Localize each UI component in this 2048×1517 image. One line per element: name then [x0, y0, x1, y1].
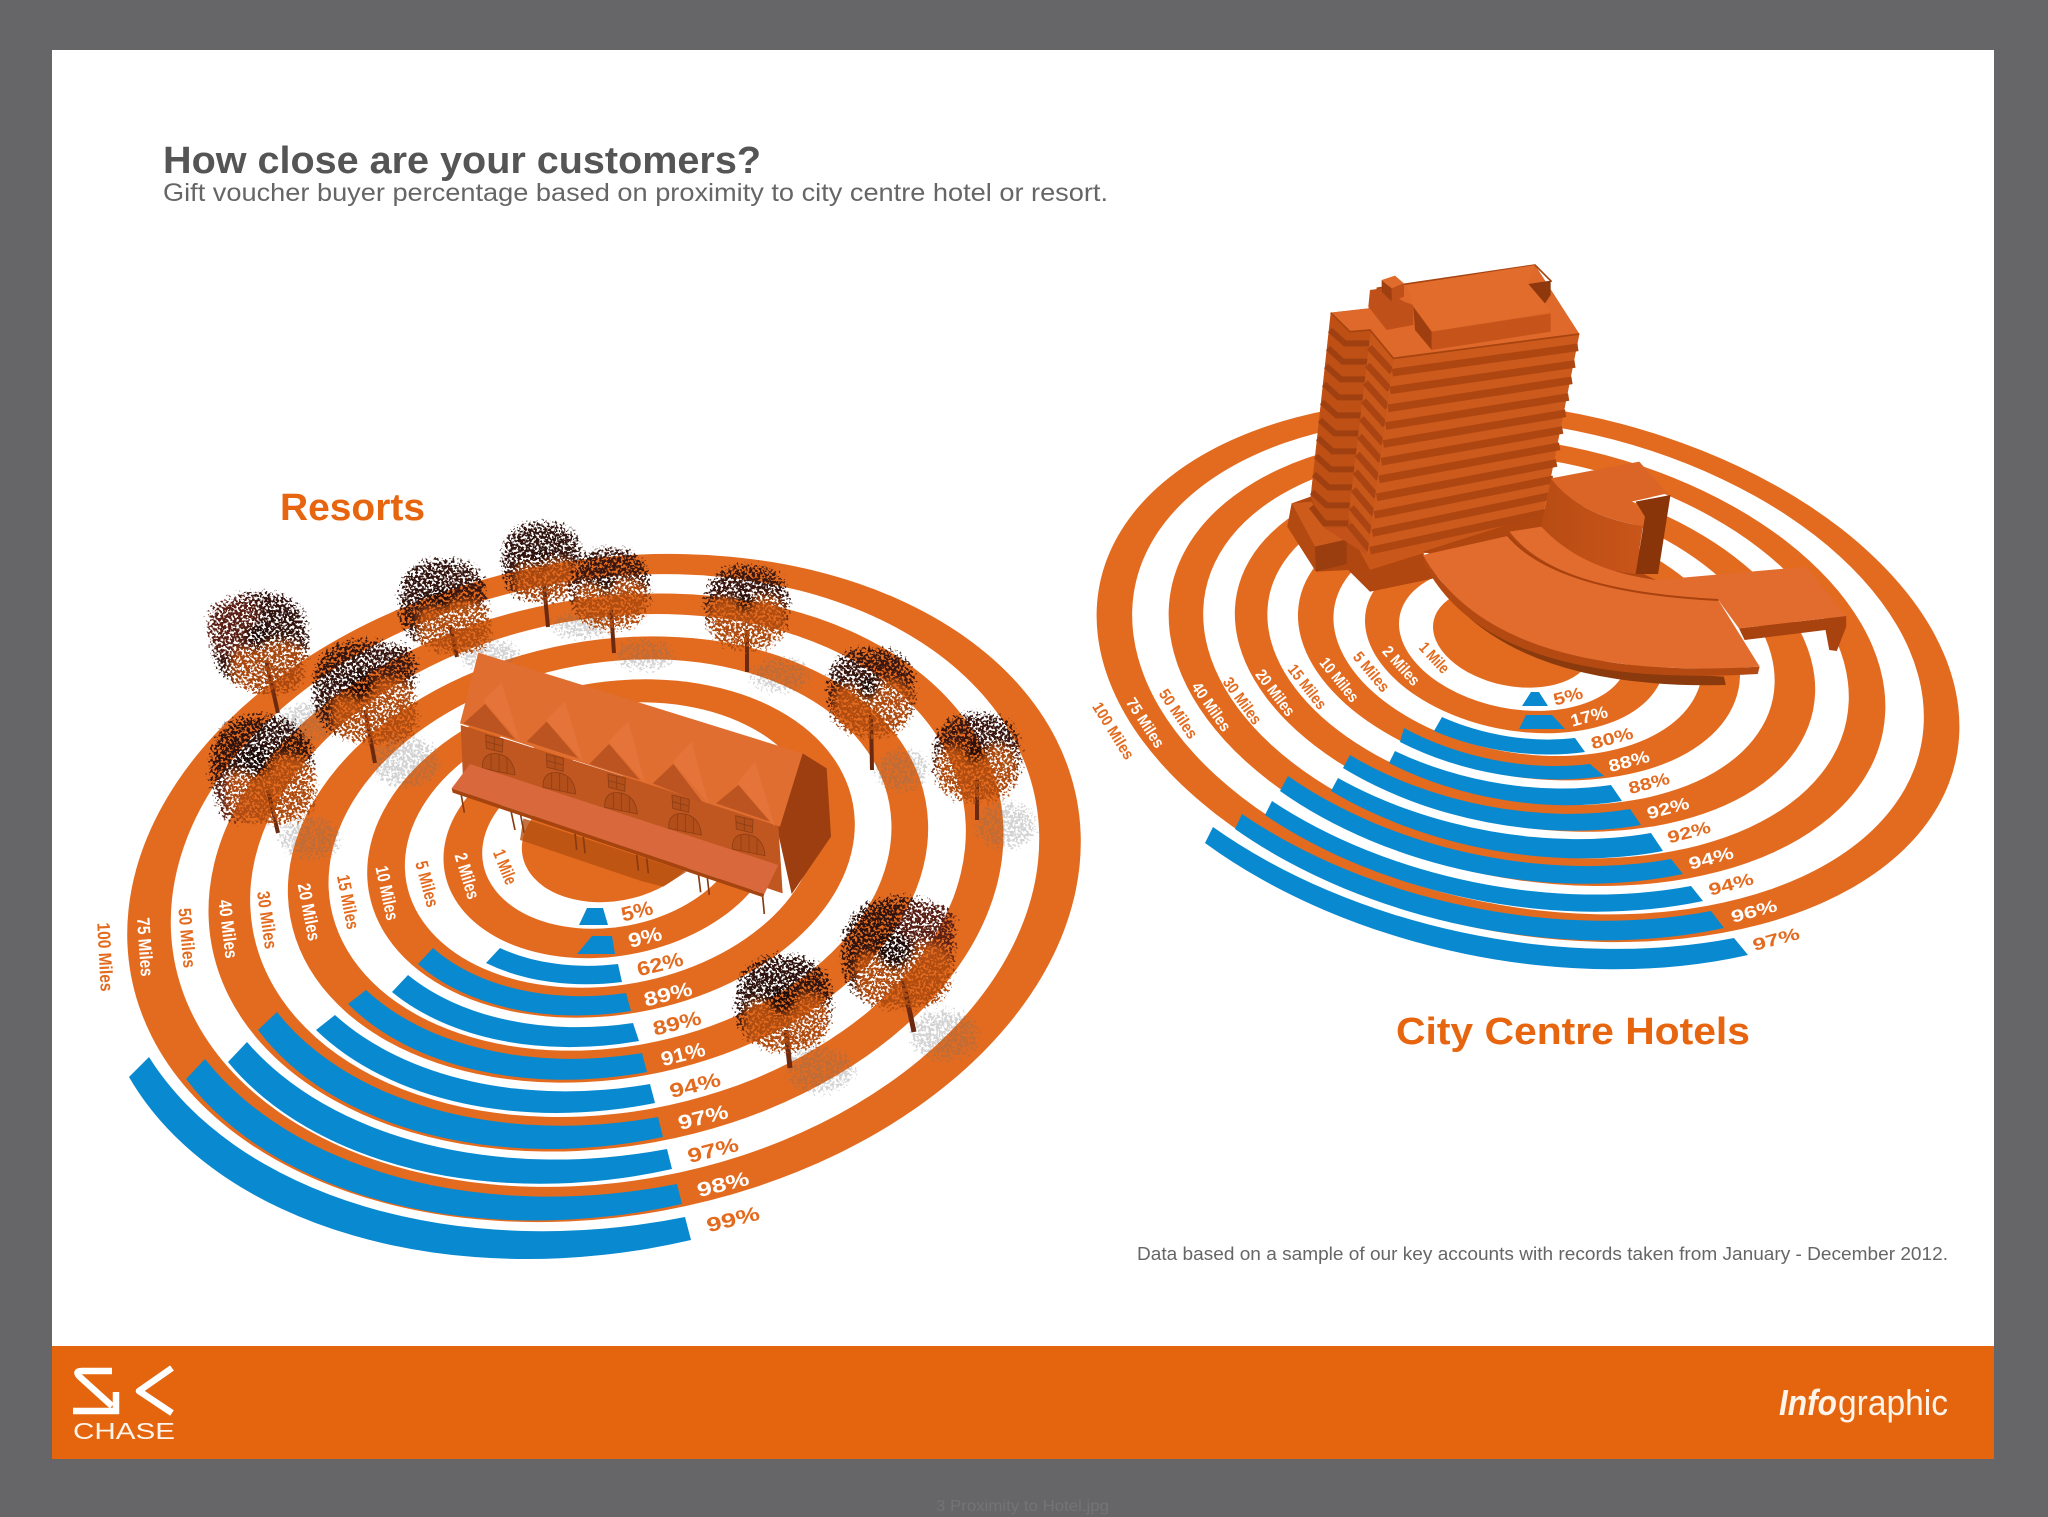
tree 1 [210, 594, 306, 713]
roof service block [1368, 288, 1413, 330]
resorts distance labels: 2 Miles [451, 851, 483, 901]
hotels distance labels: 20 Miles [1252, 667, 1298, 720]
hotels distance labels [1088, 639, 1452, 763]
title: How close are your customers? [163, 140, 761, 182]
infographic tag: graphic [1838, 1382, 1948, 1423]
tree 5 [504, 524, 580, 627]
logo word: CHASE [73, 1418, 175, 1444]
resorts distance labels: 50 Miles [174, 907, 200, 969]
hotels percentage labels: 97% [1750, 924, 1802, 955]
resorts distance labels: 30 Miles [253, 890, 281, 950]
hotels distance labels: 15 Miles [1284, 662, 1329, 713]
rear block [1311, 315, 1371, 528]
tree 9 [935, 715, 1019, 820]
podium backing [1287, 497, 1543, 592]
tree 4 [401, 561, 489, 657]
roof cube [1382, 276, 1404, 302]
resorts distance labels: 100 Miles [93, 922, 117, 992]
porch roof [452, 764, 778, 894]
lower deck top [1423, 536, 1760, 668]
podium left [1292, 502, 1347, 547]
lower deck edge [1423, 555, 1760, 676]
hotels distance labels: 30 Miles [1219, 674, 1264, 728]
infographic tag [1779, 1382, 1948, 1423]
hotels distance labels: 1 Mile [1415, 639, 1452, 677]
resorts percentage labels: 91% [659, 1039, 708, 1071]
tree 8 [829, 650, 913, 770]
data footnote: Data based on a sample of our key accounts with records taken from January - December 2012. [1137, 1244, 1948, 1264]
resort building [452, 653, 831, 914]
resorts percentage labels: 97% [676, 1101, 731, 1135]
resorts percentage labels [619, 897, 762, 1237]
hotels percentage labels: 88% [1606, 747, 1652, 776]
penthouse [1407, 265, 1551, 350]
hotels percentage labels: 94% [1686, 843, 1736, 874]
deck backing [1423, 513, 1718, 600]
hotels blue percentage bars [1205, 692, 1748, 969]
hotels distance labels: 75 Miles [1122, 695, 1167, 751]
bridge front face [1739, 616, 1846, 651]
hotels percentage labels [1551, 683, 1802, 955]
front block side face [1348, 332, 1393, 555]
main roof [460, 653, 803, 827]
resorts distance labels: 5 Miles [411, 859, 443, 909]
hotels percentage labels: 88% [1626, 769, 1672, 798]
resorts percentage labels: 89% [651, 1007, 704, 1041]
city centre hotels chart [1048, 265, 2008, 1015]
SK Chase logo [73, 1368, 175, 1444]
hotel low-rise wing and curved deck [1423, 462, 1846, 685]
infographic tag: Info [1779, 1382, 1837, 1423]
hotels distance labels: 10 Miles [1316, 655, 1362, 706]
hotels percentage labels: 80% [1589, 724, 1635, 753]
tower silhouette [1311, 265, 1579, 555]
front wall [461, 725, 783, 893]
porch posts [461, 793, 764, 914]
logo mark [73, 1368, 172, 1414]
tree 11 [738, 957, 830, 1068]
hotels distance labels: 50 Miles [1155, 686, 1200, 742]
resorts percentage labels: 9% [626, 923, 665, 953]
curved building wall [1541, 478, 1643, 574]
hotel tower [1287, 265, 1579, 592]
fin wall [1636, 495, 1670, 574]
resorts distance labels [93, 847, 521, 992]
resorts percentage labels: 97% [685, 1134, 741, 1168]
resorts percentage labels: 89% [642, 978, 695, 1012]
subtitle: Gift voucher buyer percentage based on proximity to city centre hotel or resort. [163, 179, 1108, 207]
resorts percentage labels: 98% [695, 1168, 752, 1202]
side wall [777, 753, 831, 894]
filename caption: 3 Proximity to Hotel.jpg [936, 1498, 1109, 1515]
hotels distance labels: 100 Miles [1088, 700, 1137, 763]
tree 3 [212, 717, 314, 833]
resorts percentage labels: 99% [704, 1203, 762, 1237]
front block front face [1367, 334, 1579, 555]
tree 2 [315, 642, 416, 763]
deck shadow [1438, 583, 1726, 685]
tree ground shadows [272, 605, 1043, 1100]
resorts distance labels: 1 Mile [489, 847, 521, 887]
hotels distance labels: 2 Miles [1379, 643, 1423, 690]
resorts distance labels: 40 Miles [214, 899, 242, 959]
hotels percentage labels: 96% [1729, 896, 1779, 927]
hotels distance labels: 5 Miles [1349, 649, 1392, 696]
hotels concentric rings [1048, 327, 2008, 1015]
hotels percentage labels: 17% [1568, 702, 1610, 731]
tree 6 [572, 550, 648, 653]
deck divider line [1508, 535, 1718, 600]
resorts distance labels: 10 Miles [372, 864, 402, 922]
dormers [463, 683, 775, 827]
tree 7 [707, 567, 787, 672]
footer band [52, 1346, 1994, 1459]
hotels percentage labels: 92% [1665, 818, 1713, 847]
resorts percentage labels: 94% [667, 1069, 723, 1103]
building ground shadow [520, 818, 687, 887]
resorts distance labels: 15 Miles [333, 873, 363, 931]
hotels percentage labels: 94% [1706, 869, 1756, 900]
resorts distance labels: 20 Miles [294, 882, 324, 942]
heading: City Centre Hotels: City Centre Hotels [1396, 1011, 1750, 1053]
hotels percentage labels: 92% [1645, 794, 1691, 823]
upper deck [1509, 527, 1846, 628]
resorts concentric rings [72, 479, 1136, 1297]
hotels percentage labels: 5% [1551, 683, 1585, 710]
curved building roof [1551, 462, 1667, 526]
tower roof [1331, 265, 1579, 358]
heading: Resorts: Resorts [280, 487, 425, 529]
resorts percentage labels: 62% [635, 949, 686, 981]
hotels distance labels: 40 Miles [1188, 679, 1234, 735]
resorts distance labels: 75 Miles [133, 917, 157, 977]
resorts percentage labels: 5% [619, 897, 656, 927]
podium front [1347, 517, 1543, 570]
tree 10 [844, 899, 954, 1032]
resorts chart [72, 479, 1136, 1297]
windows [482, 735, 765, 856]
resorts blue percentage bars [129, 908, 691, 1259]
